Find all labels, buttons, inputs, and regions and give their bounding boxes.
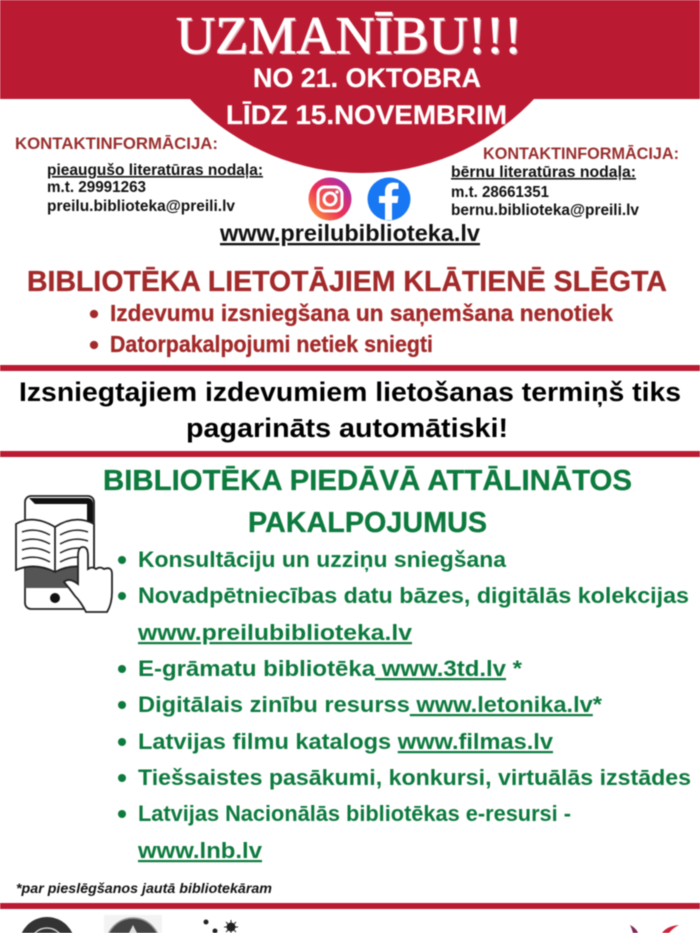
dates: LĪDZ 15.NOVEMBRIM xyxy=(226,100,507,130)
icon: facebook xyxy=(368,178,410,220)
contact block: children: bērnu literatūras nodaļa: xyxy=(451,164,636,181)
contact block: children: bernu.biblioteka@preili.lv xyxy=(451,202,639,219)
extension notice: pagarināts automātiski! xyxy=(186,413,508,443)
contact block: children: KONTAKTINFORMĀCIJA: xyxy=(483,144,679,163)
closure notice: BIBLIOTĒKA LIETOTĀJIEM KLĀTIENĒ SLĒGTA xyxy=(27,266,667,298)
contact block: adults: preilu.biblioteka@preili.lv xyxy=(47,198,235,215)
contact block: adults: pieaugušo literatūras nodaļa: xyxy=(47,162,263,179)
footer logo: red swoosh xyxy=(630,925,679,933)
icon: tablet with book and hand xyxy=(16,496,112,612)
extension notice: Izsniegtajiem izdevumiem lietošanas termiņš tiks xyxy=(19,377,681,407)
footer logo: dark circle xyxy=(19,917,75,933)
contact block: adults: KONTAKTINFORMĀCIJA: xyxy=(15,134,218,153)
services list: www.lnb.lv xyxy=(137,838,263,863)
icon: instagram xyxy=(308,178,352,220)
footnote: *par pieslēgšanos jautā bibliotekāram xyxy=(16,881,272,896)
title: UZMANĪBU!!! xyxy=(178,8,524,66)
footer logo: dots xyxy=(204,920,238,933)
services list: Tiešsaistes pasākumi, konkursi, virtuālās izstādes xyxy=(138,765,691,790)
services list: Latvijas filmu katalogs www.filmas.lv xyxy=(138,729,554,754)
services list: Konsultāciju un uzziņu sniegšana xyxy=(138,547,507,572)
closure notice xyxy=(27,266,667,357)
contact block: children xyxy=(451,144,679,219)
contact block: adults: m.t. 29991263 xyxy=(47,179,146,196)
remote services heading xyxy=(103,465,632,539)
contact block: children: m.t. 28661351 xyxy=(451,184,549,201)
closure notice: Datorpakalpojumi netiek sniegti xyxy=(110,331,433,357)
remote services heading: BIBLIOTĒKA PIEDĀVĀ ATTĀLINĀTOS xyxy=(103,465,632,497)
services list: E-grāmatu bibliotēka www.3td.lv * xyxy=(138,656,522,681)
dates: NO 21. OKTOBRA xyxy=(253,63,481,93)
closure notice: Izdevumu izsniegšana un saņemšana nenotiek xyxy=(110,300,613,326)
services list: www.preilubiblioteka.lv xyxy=(137,620,413,645)
remote services heading: PAKALPOJUMUS xyxy=(248,507,487,539)
contact block: adults xyxy=(15,134,263,215)
header banner xyxy=(0,0,700,173)
services list xyxy=(118,547,691,863)
title: UZMANĪBU!!! xyxy=(176,7,522,65)
services list: Novadpētniecības datu bāzes, digitālās kolekcijas xyxy=(138,583,689,608)
footer logo: grey circle xyxy=(104,915,162,933)
website link: www.preilubiblioteka.lv xyxy=(219,220,480,246)
services list: Digitālais zinību resurss www.letonika.lv * xyxy=(138,692,602,717)
extension notice xyxy=(19,377,681,443)
services list: Latvijas Nacionālās bibliotēkas e-resursi - xyxy=(138,801,571,826)
dates xyxy=(226,63,507,130)
